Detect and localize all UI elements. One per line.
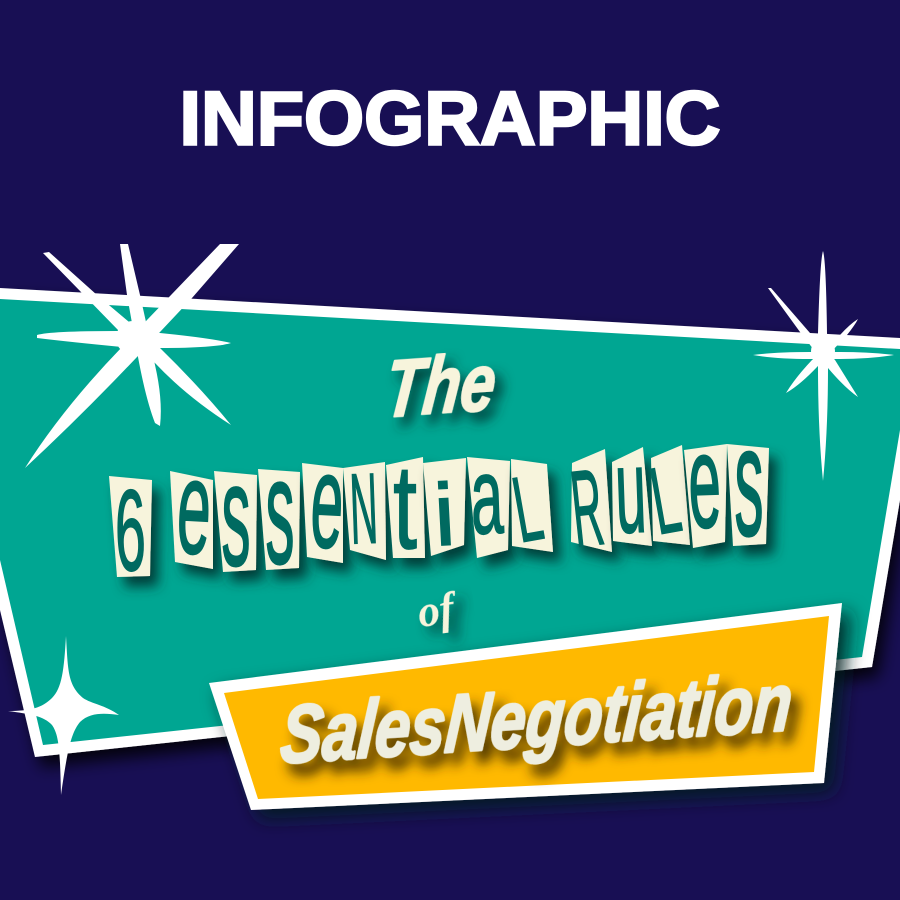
tile: 6: 6 xyxy=(114,466,147,596)
tile: e: e xyxy=(307,426,347,576)
tile: e: e xyxy=(686,406,723,556)
tile: i: i xyxy=(431,466,458,565)
panel: yellow banner xyxy=(209,603,842,810)
tile: i xyxy=(423,458,466,565)
tile: s xyxy=(214,435,257,597)
panel: teal banner xyxy=(0,288,900,757)
tile: l: L xyxy=(643,445,688,554)
tile: s: s xyxy=(734,395,764,568)
tile: r: R xyxy=(566,448,609,570)
tile: a: a xyxy=(469,437,505,557)
tile: s xyxy=(258,428,300,596)
title: INFOGRAPHIC xyxy=(180,76,720,162)
heading: The: The xyxy=(381,337,500,435)
icon: four point sparkle xyxy=(8,636,119,795)
tile: l: L xyxy=(505,455,550,562)
tile: t: t xyxy=(393,441,417,575)
tile: s: s xyxy=(222,435,250,597)
tile: t xyxy=(386,441,425,575)
heading: of: of xyxy=(415,583,461,637)
tile: s xyxy=(727,395,769,568)
tile: s: s xyxy=(266,428,294,596)
tile: e: e xyxy=(174,432,215,582)
tile: n: N xyxy=(348,454,379,566)
tile: u: u xyxy=(613,424,648,558)
icon: large starburst xyxy=(25,244,239,468)
heading: 6 essential rules cut-out tiles xyxy=(109,395,769,597)
icon: right starburst xyxy=(753,251,894,481)
